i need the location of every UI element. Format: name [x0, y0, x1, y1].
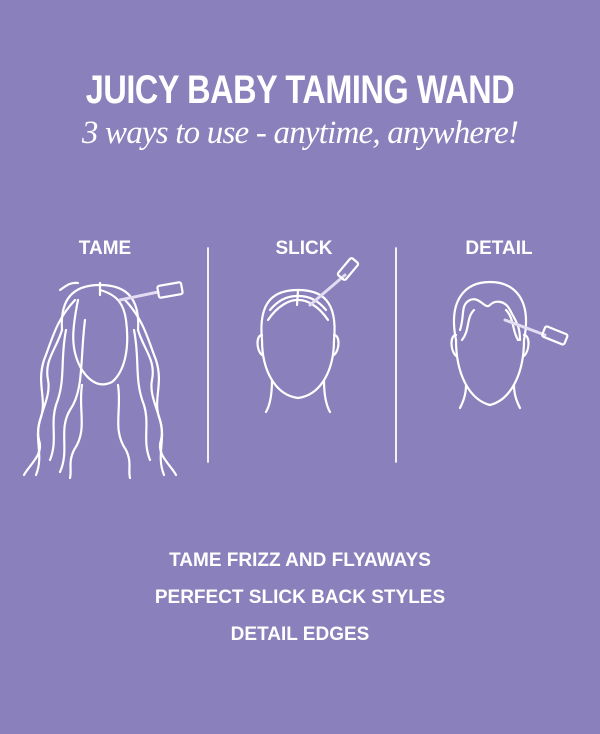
subtitle: 3 ways to use - anytime, anywhere! — [82, 115, 518, 151]
icon: tame wand — [120, 282, 183, 300]
icon: slick face — [258, 290, 338, 412]
benefit list: TAME FRIZZ AND FLYAWAYS — [169, 550, 431, 571]
icon: detail face — [452, 282, 528, 408]
benefit list: DETAIL EDGES — [231, 624, 369, 645]
icon: tame long wavy hair — [24, 283, 176, 478]
benefit list — [155, 550, 445, 645]
label: detail: DETAIL — [465, 238, 533, 259]
benefit list: PERFECT SLICK BACK STYLES — [155, 587, 445, 608]
title: JUICY BABY TAMING WAND — [86, 68, 514, 112]
icon: detail wand — [505, 320, 568, 345]
label: tame: TAME — [79, 238, 131, 259]
icon: slick wand — [310, 257, 359, 305]
label: slick: SLICK — [276, 238, 332, 259]
